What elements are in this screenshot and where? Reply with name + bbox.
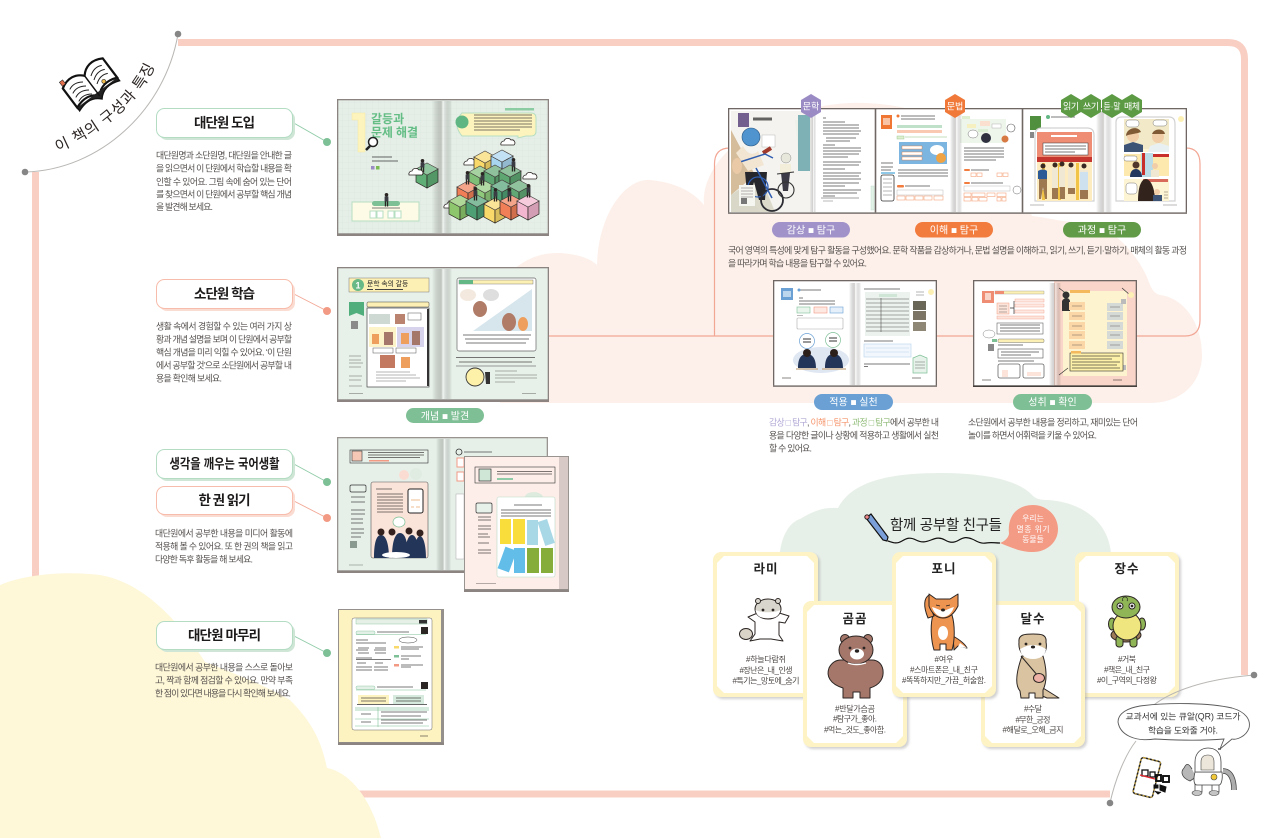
text: 탐구 설명: 국어 영역의 특성에 맞게 탐구 활동을 구성했어요. 문학 작품을 감상하거나, 문법 설명을 이해하고, 읽기, 쓰기, 듣기·말하기, 매체의 활동 과정 (728, 244, 1187, 256)
text: 대단원 도입 설명: 을 읽으면서 이 단원에서 학습할 내용을 확 (156, 162, 292, 174)
text: 대단원 마무리 설명 (155, 662, 293, 698)
text: 대단원 도입 설명 (156, 150, 292, 212)
label: 대단원 도입 (156, 108, 295, 140)
background blob: yellow (0, 573, 381, 838)
label: 대단원 도입: 대단원 도입 (194, 116, 255, 130)
label: 한 권 읽기 (156, 486, 295, 517)
pill: 성취 확인: 성취 ■ 확인 (1028, 396, 1077, 408)
pill: 과정 탐구: 과정 ■ 탐구 (1078, 224, 1126, 236)
book: 생각을 깨우는 국어생활 (337, 437, 548, 573)
heading: 함께 공부할 친구들 (865, 514, 1002, 543)
card: 장수: #책은_내_친구 (1104, 664, 1150, 674)
pill: 감상 탐구: 감상 ■ 탐구 (787, 224, 835, 236)
pill: 이해 탐구 (915, 222, 993, 238)
card: 곰곰: #먹는_것도_좋아함. (824, 724, 886, 734)
card: 라미 (713, 552, 820, 699)
text: 대단원 도입 설명: 대단원명과 소단원명, 대단원을 안내한 글 (156, 150, 292, 160)
text: 성취 확인 설명 (968, 416, 1138, 440)
text: 소단원 학습 설명: 에서 공부할 것’으로 소단원에서 공부할 내 (156, 360, 292, 370)
illustration: bear (828, 634, 883, 698)
book: 대단원 도입: 문제 해결 (371, 124, 418, 140)
text: 한 권 읽기 설명: 다양한 독후 활동을 해 보세요. (155, 554, 253, 564)
text: 소단원 학습 설명: 핵심 개념을 미리 익힐 수 있어요. ‘이 단원 (156, 346, 292, 358)
pill: 개념 발견: 개념 ■ 발견 (421, 410, 469, 422)
illustration: turtle (1108, 596, 1146, 647)
card: 장수 (1075, 552, 1181, 699)
corner arc top left (22, 31, 181, 175)
hashtags: #여우 (934, 654, 954, 664)
card: 달수: #무한_긍정 (1016, 714, 1050, 724)
card: 포니: 포니 (931, 562, 957, 576)
label: 소단원 학습 (156, 280, 295, 311)
panel: vocabulary game (1063, 291, 1127, 376)
illustration: flying squirrel (740, 598, 789, 641)
callout: 우리는 멸종 위기 동물들: 멸종 위기 (1016, 524, 1050, 534)
icon: pencil (865, 514, 888, 541)
connector dots (323, 138, 331, 657)
hexagon tag: 문학: 문학 (803, 102, 819, 112)
panel: book activity (497, 497, 555, 577)
hexagon tags: 읽기 쓰기 듣말 매체: 듣·말 (1104, 100, 1120, 112)
speech bubble (1118, 704, 1249, 749)
corner arc bottom right (1107, 672, 1257, 806)
text: 한 권 읽기 설명 (155, 528, 293, 564)
illustration: otter (1017, 634, 1059, 698)
book: 적용 실천 (773, 280, 937, 387)
speech bubble: 학습을 도와줄 거야. (1148, 724, 1218, 736)
card: 곰곰 (803, 601, 909, 749)
text: 탐구 설명: 을 따라가며 학습 내용을 탐구할 수 있어요. (728, 258, 867, 268)
label: 대단원 마무리: 대단원 마무리 (188, 628, 261, 643)
text: 소단원 학습 설명: 용을 확인해 보세요. (156, 372, 222, 384)
background cloud: peach (500, 103, 1202, 403)
pill: 감상 탐구 (772, 222, 850, 238)
hexagon tag: 문법: 문법 (947, 102, 963, 112)
hashtags: #거북 (1118, 655, 1136, 664)
speech bubble: 교과서에 있는 큐알(QR) 코드가 (1126, 710, 1240, 722)
panel: media board (1035, 128, 1094, 201)
pill: 개념 발견 (406, 408, 484, 423)
text: 한 권 읽기 설명: 대단원에서 공부한 내용을 미디어 활동에 (155, 528, 293, 538)
card: 라미: #장난은_내_인생 (740, 665, 792, 675)
icon: open book (59, 53, 122, 114)
card: 라미: #특기는_망토에_숨기 (732, 676, 800, 686)
text: 소단원 학습 설명: 황과 개념 설명을 보며 이 단원에서 공부할 (156, 334, 292, 344)
hashtags: #반달가슴곰 (835, 704, 875, 714)
hexagon tag: 문학 (801, 94, 821, 118)
callout: 우리는 멸종 위기 동물들: 동물들 (1022, 535, 1044, 544)
illustration: stacked cubes (444, 138, 539, 223)
hexagon tag: 문법 (945, 94, 965, 118)
illustration: astronaut (1182, 748, 1234, 796)
label: 생각을 깨우는 국어생활: 생각을 깨우는 국어생활 (170, 456, 280, 472)
connector lines from left column (292, 122, 327, 653)
pill: 적용 실천: 적용 ■ 실천 (829, 396, 878, 408)
text: 적용 실천 설명: 감상 □ 탐구, 이해 □ 탐구, 과정 □ 탐구에서 공부한 내 (769, 416, 939, 428)
text: 대단원 도입 설명: 를 찾으면서 이 단원에서 공부할 핵심 개념 (156, 188, 292, 200)
book: 소단원 학습: 문학 속의 갈등 (367, 279, 408, 288)
book: 문법 (875, 108, 1023, 214)
book: 성취 확인 (973, 280, 1137, 387)
pill: 적용 실천 (814, 394, 893, 410)
book: 문학 (728, 108, 876, 214)
card: 포니 (892, 552, 998, 699)
panel: concept (457, 278, 536, 351)
hexagon tags: 읽기 쓰기 듣말 매체: 읽기 (1063, 102, 1079, 112)
speech panel (457, 113, 536, 138)
hexagon tags: 읽기 쓰기 듣말 매체: 매체 (1124, 102, 1140, 112)
panel: comic (1116, 117, 1175, 201)
label: 생각을 깨우는 국어생활 (156, 450, 295, 481)
text: 대단원 도입 설명: 인할 수 있어요. 그림 속에 숨어 있는 단어 (156, 176, 292, 187)
text: 적용 실천 설명 (769, 416, 939, 454)
card: 달수: 달수 (1020, 612, 1046, 626)
text: 성취 확인 설명: 소단원에서 공부한 내용을 정리하고, 재미있는 단어 (968, 416, 1138, 428)
pill: 이해 탐구: 이해 ■ 탐구 (930, 224, 978, 236)
hexagon tags: 읽기 쓰기 듣말 매체: 쓰기 (1083, 102, 1099, 112)
callout: 우리는 멸종 위기 동물들 (1000, 505, 1058, 552)
card: 포니: #똑똑하지만_가끔_허술함. (902, 675, 986, 685)
illustration: fox (925, 594, 967, 650)
hashtags: #하늘다람쥐 (746, 654, 786, 664)
text: 대단원 마무리 설명: 대단원에서 공부한 내용을 스스로 돌아보 (155, 662, 293, 672)
text: 소단원 학습 설명: 생활 속에서 경험할 수 있는 여러 가지 상 (156, 320, 292, 332)
connector: salmon bracket (549, 148, 1200, 336)
text: 적용 실천 설명: 용을 다양한 글이나 상황에 적용하고 생활에서 실천 (769, 430, 939, 440)
text: 적용 실천 설명: 할 수 있어요. (769, 442, 812, 454)
callout: 우리는 멸종 위기 동물들: 우리는 (1022, 514, 1044, 523)
text: 탐구 설명 (728, 244, 1187, 268)
unit number and heading: 1 (355, 280, 361, 290)
icon: phone with QR (1133, 757, 1169, 798)
card: 곰곰: #탐구가_좋아. (833, 714, 877, 724)
text: 대단원 마무리 설명: 한 점이 있다면 내용을 다시 확인해 보세요. (155, 688, 291, 698)
card: 라미: 라미 (753, 562, 779, 576)
label: 한 권 읽기: 한 권 읽기 (198, 493, 250, 508)
card: 곰곰: 곰곰 (842, 612, 868, 626)
book: 대단원 도입 (337, 99, 549, 236)
card: 장수: #이_구역의_다정왕 (1097, 675, 1158, 685)
book: 한 권 읽기 (464, 456, 569, 592)
hexagon tags: 읽기 쓰기 듣말 매체 (1061, 94, 1142, 118)
label: 대단원 마무리 (156, 622, 295, 652)
card: 달수 (981, 601, 1087, 749)
label: 소단원 학습: 소단원 학습 (194, 286, 255, 302)
card: 달수: #해달로_오해_금지 (1002, 724, 1064, 734)
panel: reading (371, 482, 428, 558)
pill: 성취 확인 (1013, 394, 1092, 410)
book: 소단원 학습 (337, 267, 549, 402)
card: 장수: 장수 (1114, 562, 1140, 576)
text: 한 권 읽기 설명: 적용해 볼 수 있어요. 또 한 권의 책을 읽고 (155, 540, 293, 552)
text: 소단원 학습 설명 (156, 320, 292, 384)
heading in book: 갈등과 (371, 111, 404, 126)
card: 포니: #스마트폰은_내_친구 (910, 664, 978, 674)
text: 대단원 마무리 설명: 고, 짝과 함께 점검할 수 있어요. 만약 부족 (155, 674, 293, 686)
text: 성취 확인 설명: 놀이를 하면서 어휘력을 키울 수 있어요. (968, 430, 1097, 440)
illustration: bicycle (731, 111, 811, 212)
pill: 과정 탐구 (1063, 222, 1141, 238)
book: 대단원 마무리 (338, 609, 444, 745)
text: 대단원 도입 설명: 을 발견해 보세요. (156, 201, 213, 212)
hashtags: #수달 (1024, 704, 1043, 714)
background cloud: green (780, 473, 1111, 640)
title: 이 책의 구성과 특징: 이 책의 구성과 특징 (56, 62, 154, 149)
heading: 함께 공부할 친구들: 함께 공부할 친구들 (890, 517, 1002, 534)
book: 읽기 쓰기 듣말 매체 (1022, 108, 1187, 214)
